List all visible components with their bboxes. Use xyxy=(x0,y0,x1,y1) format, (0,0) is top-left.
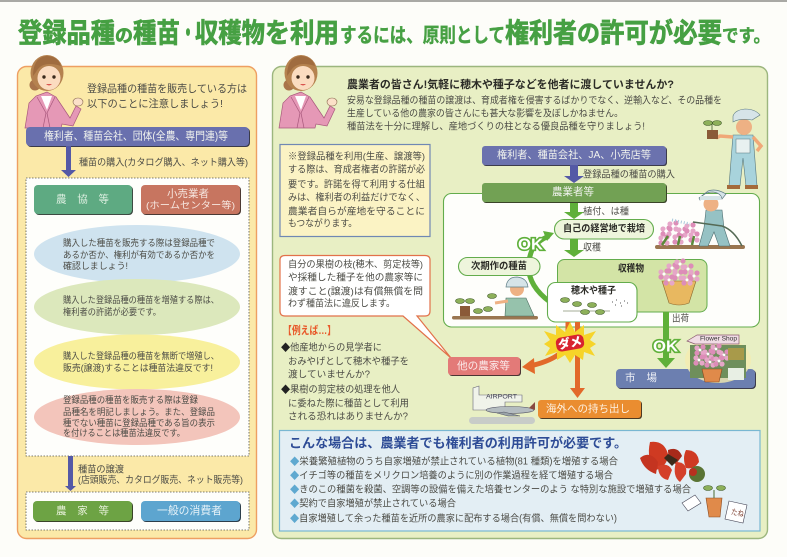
arrow: seed transfer xyxy=(65,456,76,491)
illustration: farmer watering flowers xyxy=(655,190,745,249)
oval: labeling: を付けることは種苗法違反です。 xyxy=(63,427,185,438)
pill: grow on own farm xyxy=(554,220,654,239)
oval: unauthorized sales xyxy=(34,334,240,390)
title: 種苗 xyxy=(133,18,180,48)
callout: transfer violation: や採種した種子を他の農家等に xyxy=(288,272,423,284)
oval: labeling: 品種名を明記しましょう。また、登録品 xyxy=(63,406,215,417)
title: 登録品種 xyxy=(18,18,115,48)
title: の xyxy=(577,20,600,48)
pill: cuttings and seeds xyxy=(548,282,637,322)
list of cases: ◆栄養繁殖植物のうち自家増殖が禁止されている植物(81 種類)を増殖する場合 xyxy=(290,454,618,468)
callout: transfer violation: 渡すこと(譲渡)は有償無償を問 xyxy=(288,286,423,298)
title: ・ xyxy=(181,18,195,48)
oval: check registration xyxy=(34,225,240,283)
illustration: airport xyxy=(469,386,535,424)
panel: cases requiring permission xyxy=(280,430,760,531)
rights holders bar: 権利者、種苗会社、団体(全農、専門連)等 xyxy=(44,128,228,142)
label: shipping: 出荷 xyxy=(672,312,689,324)
examples: おみやげとして穂木や種子を xyxy=(288,354,409,368)
bar: farmers xyxy=(482,183,667,203)
note box: みは、権利者の利益だけでなく、 xyxy=(288,192,425,204)
oval: labeling xyxy=(34,389,240,445)
callout: transfer violation xyxy=(280,256,451,358)
pill: next crop seedlings: 次期作の種苗 xyxy=(471,260,527,272)
label: seed transfer: (店頭販売、カタログ販売、ネット販売等) xyxy=(78,474,243,486)
arrow: planting xyxy=(564,203,584,219)
title: するには、原則として xyxy=(340,24,505,47)
illustration: airport: AIRPORT xyxy=(486,394,517,400)
bar: market xyxy=(616,369,756,389)
button: farmers xyxy=(33,501,133,522)
panel: notes for farmers xyxy=(272,55,768,538)
arrow: overseas NG xyxy=(570,322,585,398)
illustration: strawberries xyxy=(640,442,705,482)
arrow head: OK xyxy=(543,231,554,241)
label: purchase: 登録品種の種苗の購入 xyxy=(583,168,675,180)
illustration: farmer holding seedling xyxy=(704,109,761,189)
bar: market: 市場 xyxy=(625,371,658,384)
callout: transfer violation: 自分の果樹の枝(穂木、剪定枝等) xyxy=(288,258,423,270)
note box: 農業者自らが産地を守ることに xyxy=(288,206,425,218)
badge: NG starburst: ダメ xyxy=(557,333,583,352)
heading and intro: 安易な登録品種の種苗の譲渡は、育成者権を侵害するばかりでなく、逆輸入など、その品種を xyxy=(347,94,722,106)
dotted box: buyers xyxy=(26,492,249,530)
box: export overseas: 海外への持ち出し xyxy=(546,402,630,415)
title: の xyxy=(115,26,133,46)
illustration: potted seedling with tag: たね xyxy=(730,507,745,519)
list of cases: ◆イチゴ等の種苗をメリクロン培養のように別の作業過程を経て増殖する場合 xyxy=(290,468,613,482)
label: seed purchase: 種苗の購入(カタログ購入、ネット購入等) xyxy=(79,156,248,168)
button: retailers xyxy=(141,185,241,215)
illustration: woman guide xyxy=(25,55,83,128)
bar: rights holders: 権利者、種苗会社、JA、小売店等 xyxy=(497,148,651,161)
heading and intro xyxy=(347,77,722,132)
examples: される恐れはありませんか? xyxy=(288,410,409,422)
scan edge xyxy=(0,0,787,2)
icon: leaves and seeds xyxy=(560,298,628,314)
illustration: potted seedling with tag xyxy=(682,486,747,523)
button: farmers: 農家等 xyxy=(56,504,110,517)
bar: rights holders xyxy=(482,146,667,166)
callout: transfer violation: わず種苗法に違反します。 xyxy=(288,298,395,310)
oval: check registration: 確認しましょう! xyxy=(63,260,128,271)
arrow: to farmers xyxy=(564,165,584,183)
label: OK shipping: OK xyxy=(653,338,678,356)
intro text xyxy=(87,82,247,110)
list of cases: ◆きのこの種菌を殺菌、空調等の設備を備えた培養センターのよう な特別な施設で増殖する場合 xyxy=(290,482,691,496)
arrow: seedlings reuse OK xyxy=(529,236,550,302)
examples: 渡していませんか? xyxy=(288,368,371,380)
badge: NG starburst xyxy=(544,322,596,363)
label: OK left: OK xyxy=(518,236,543,254)
note box: もつながります。 xyxy=(288,218,357,230)
bar: farmers: 農業者等 xyxy=(552,185,594,198)
illustration: flower shop xyxy=(685,335,751,383)
title: 利用 xyxy=(290,18,339,48)
note box: 要です。許諾を得て利用する仕組 xyxy=(288,178,425,190)
note box xyxy=(280,144,430,236)
intro text: 以下のことに注意しましょう! xyxy=(87,97,223,110)
oval: check registration: 購入した種苗を販売する際は登録品種で xyxy=(63,237,215,248)
flow panel: farm xyxy=(444,194,760,327)
button: retailers: 小売業者 xyxy=(167,187,209,200)
dotted box: retailers and advice xyxy=(26,178,249,456)
title: です。 xyxy=(722,26,770,46)
panel: harvest xyxy=(558,260,707,312)
oval: permission needed: 購入した登録品種の種苗を増殖する際は、 xyxy=(63,294,219,305)
title: 権利者 xyxy=(505,18,577,48)
title xyxy=(18,18,770,48)
arrow: to other farmers NG xyxy=(530,322,568,366)
arrow: shipping OK xyxy=(657,312,675,368)
list of cases xyxy=(290,454,691,524)
pill: cuttings and seeds: 穂木や種子 xyxy=(571,284,616,296)
oval: check registration: あるか否か、権利が有効であるか否かを xyxy=(63,249,215,260)
illustration: flower basket xyxy=(658,258,700,305)
button: consumers: 一般の消費者 xyxy=(157,503,222,517)
examples: に委ねた際に種苗として利用 xyxy=(288,396,409,410)
label: seed transfer: 種苗の譲渡 xyxy=(78,464,124,476)
panel: notes for seed sellers xyxy=(18,55,256,538)
oval: labeling: 登録品種の種苗を販売する際は登録 xyxy=(63,394,198,405)
button: consumers xyxy=(141,501,241,522)
intro text: 登録品種の種苗を販売している方は xyxy=(87,82,247,95)
pill: grow on own farm: 自己の経営地で栽培 xyxy=(563,222,645,234)
oval: permission needed: 権利者の許諾が必要です。 xyxy=(63,306,161,317)
oval: unauthorized sales: 販売(譲渡)することは種苗法違反です! xyxy=(63,362,213,373)
arrow: seed purchase xyxy=(61,146,76,177)
illustration: flower shop: Flower Shop xyxy=(700,336,738,342)
heading: こんな場合は、農業者でも権利者の利用許可が必要です。 xyxy=(289,436,627,450)
arrow: harvest xyxy=(564,239,584,257)
examples: 【例えば…】 xyxy=(283,323,336,337)
heading and intro: 農業者の皆さん!気軽に穂木や種子などを他者に渡していませんか? xyxy=(347,77,674,91)
box: export overseas xyxy=(538,400,642,419)
heading and intro: 種苗法を十分に理解し、産地づくりの柱となる優良品種を守りましょう! xyxy=(347,120,645,132)
button: retailers: (ホームセンター等) xyxy=(146,200,235,212)
rights holders bar xyxy=(26,127,250,147)
button: JA: 農協等 xyxy=(56,192,110,206)
pill: next crop seedlings xyxy=(458,258,540,276)
label: seed transfer xyxy=(78,464,243,486)
illustration: kneeling farmer and sprouts xyxy=(452,277,538,320)
box: other farmers xyxy=(448,357,521,376)
label: harvest: 収穫 xyxy=(583,242,601,254)
button: JA xyxy=(34,185,133,215)
panel: harvest: 収穫物 xyxy=(618,262,644,274)
examples: ◆他産地からの見学者に xyxy=(281,340,382,354)
title: 収穫物 xyxy=(195,18,265,48)
list of cases: ◆自家増殖して余った種苗を近所の農家に配布する場合(有償、無償を問わない) xyxy=(290,512,617,524)
oval: permission needed xyxy=(34,279,240,335)
arrow head: to other farmers xyxy=(522,358,535,374)
title: を xyxy=(265,18,290,48)
oval: labeling: 種でない種苗に登録品種である旨の表示 xyxy=(63,417,215,428)
box: other farmers: 他の農家等 xyxy=(457,359,511,372)
title: 許可が必要 xyxy=(600,18,722,48)
label: planting: 植付、は種 xyxy=(583,206,629,218)
oval: unauthorized sales: 購入した登録品種の種苗を無断で増殖し、 xyxy=(63,350,219,361)
examples xyxy=(281,323,409,422)
note box: ※登録品種を利用(生産、譲渡等) xyxy=(288,150,425,162)
note box: する際は、育成者権者の許諾が必 xyxy=(288,164,425,176)
illustration: woman guide xyxy=(279,55,337,128)
examples: ◆果樹の剪定枝の処理を他人 xyxy=(281,382,400,396)
heading and intro: 生産している他の農家の皆さんにも甚大な影響を及ぼしかねません。 xyxy=(347,106,623,120)
list of cases: ◆契約で自家増殖が禁止されている場合 xyxy=(290,496,456,510)
